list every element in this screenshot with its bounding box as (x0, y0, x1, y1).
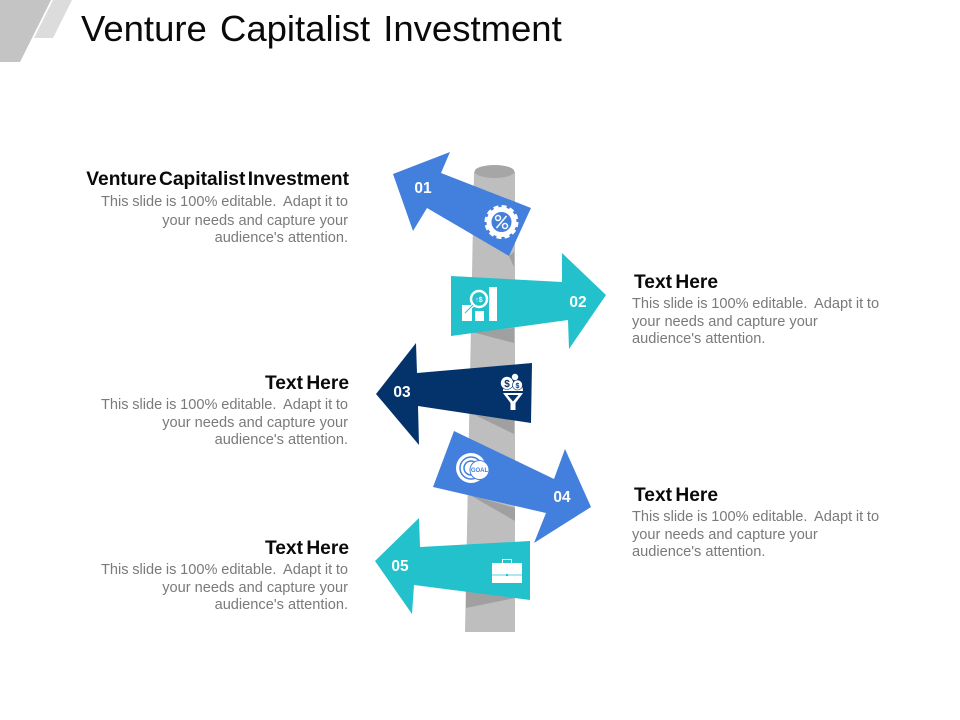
arrow 04 (433, 431, 591, 543)
icon: briefcase (492, 560, 522, 583)
icon: funnel with coins (500, 374, 523, 410)
text block: Venture Capitalist Investment: audience's attention. (215, 230, 348, 246)
arrow 01 (393, 152, 531, 256)
pole (465, 165, 515, 632)
text block: 03 Text Here: your needs and capture your (162, 415, 348, 431)
text block: 03 Text Here: This slide is 100% editable. Adapt it to (101, 397, 348, 413)
text block: 02 Text Here: Text Here (634, 272, 718, 293)
icon: goal target: GOAL (471, 468, 488, 474)
text block: 04 Text Here: This slide is 100% editable. Adapt it to (632, 509, 879, 525)
icon: goal target (456, 453, 490, 483)
text block: 03 Text Here: Text Here (265, 373, 349, 394)
text block: Venture Capitalist Investment: Venture Capitalist Investment (86, 169, 350, 190)
text block: 02 Text Here: audience's attention. (632, 331, 765, 347)
arrow shadows on pole (466, 252, 515, 608)
number 01: 01 (414, 180, 432, 197)
text block: 05 Text Here: This slide is 100% editable. Adapt it to (101, 562, 348, 578)
text block: Venture Capitalist Investment: This slide is 100% editable. Adapt it to (101, 194, 348, 210)
text block: 03 Text Here (101, 373, 349, 448)
text block: 05 Text Here: Text Here (265, 538, 349, 559)
arrow 03 (376, 343, 532, 445)
text block: 04 Text Here: audience's attention. (632, 544, 765, 560)
text block: 04 Text Here (632, 485, 879, 560)
text block: Venture Capitalist Investment (86, 169, 350, 246)
decorative corner shapes (0, 0, 72, 62)
text block: 05 Text Here: your needs and capture your (162, 580, 348, 596)
text block: 05 Text Here: audience's attention. (215, 597, 348, 613)
text block: 02 Text Here (632, 272, 879, 347)
arrow 05 (375, 518, 530, 614)
text block: 02 Text Here: This slide is 100% editable. Adapt it to (632, 296, 879, 312)
icon: funnel with coins: $ (516, 383, 520, 390)
icon: bar chart with magnifier (462, 287, 497, 321)
number 05: 05 (391, 558, 409, 575)
arrow 02 (451, 253, 606, 349)
text block: 03 Text Here: audience's attention. (215, 432, 348, 448)
icon: gear with percent (486, 206, 517, 238)
text block: 05 Text Here (101, 538, 349, 613)
text block: 04 Text Here: your needs and capture your (632, 527, 818, 543)
icon: bar chart with magnifier: ↑$ (475, 297, 483, 304)
number 03: 03 (393, 384, 411, 401)
text block: 04 Text Here: Text Here (634, 485, 718, 506)
title: Venture Capitalist Investment (81, 8, 562, 49)
number 04: 04 (553, 489, 571, 506)
icon: funnel with coins: $ (504, 379, 510, 390)
text block: Venture Capitalist Investment: your needs and capture your (162, 213, 348, 229)
number 02: 02 (569, 294, 587, 311)
text block: 02 Text Here: your needs and capture your (632, 314, 818, 330)
